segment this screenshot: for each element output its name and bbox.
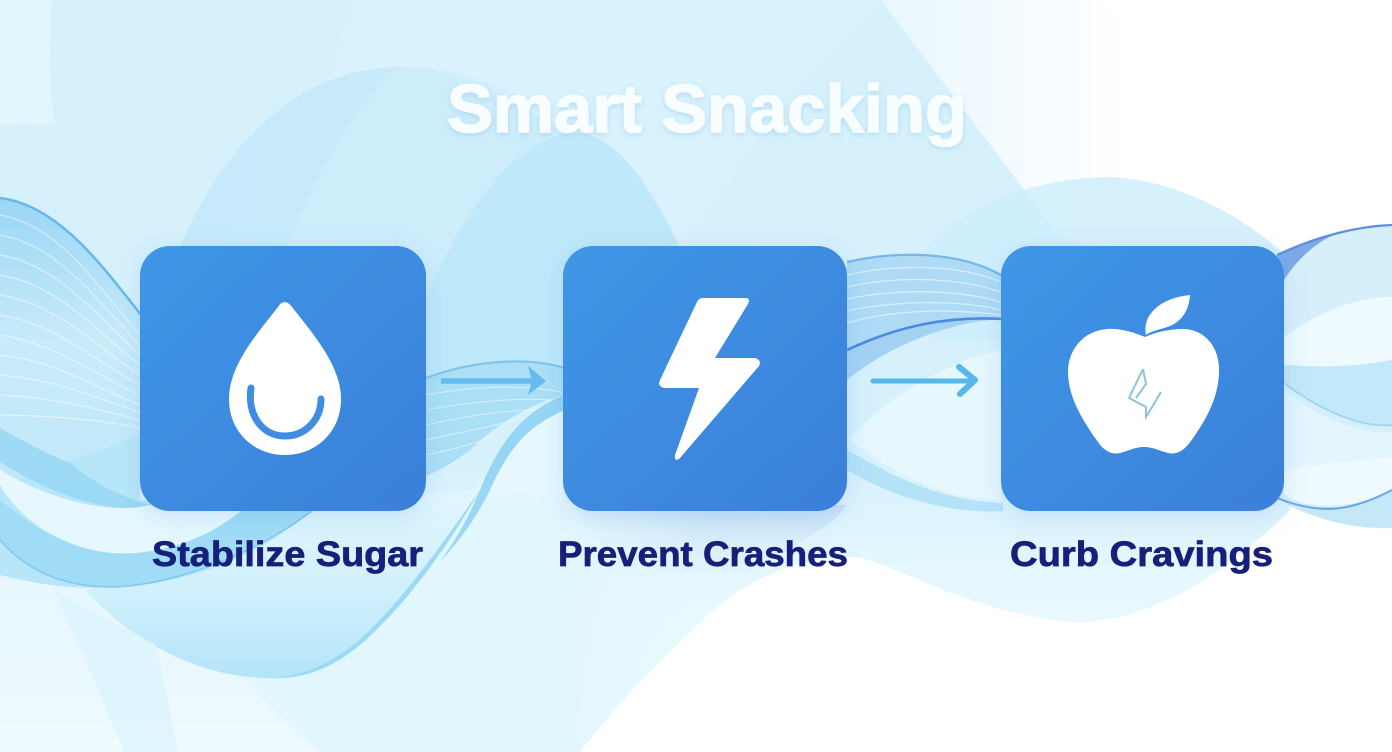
arrow: step 1 to step 2: [441, 366, 546, 395]
ribbon: between cards 1 and 2: [426, 361, 565, 562]
ribbon: far right: [1277, 225, 1392, 528]
arch: upper left: [160, 67, 690, 400]
card: prevent crashes: [563, 246, 847, 511]
step 2: prevent crashes: [558, 246, 848, 574]
card: curb cravings: [1001, 246, 1284, 511]
arch: centre: [426, 133, 690, 400]
under-card pale areas: [850, 350, 1001, 500]
icon: apple: [1068, 295, 1219, 454]
card: stabilize sugar: [140, 246, 426, 511]
label: stabilize sugar: Stabilize Sugar: [152, 535, 423, 574]
icon: water drop: [229, 302, 341, 455]
pale sweep below U: [241, 480, 700, 752]
ribbon: lower left sweep: [0, 428, 312, 588]
step 3: curb cravings: [1001, 246, 1284, 574]
ribbon: far left: [0, 198, 142, 485]
label: prevent crashes: Prevent Crashes: [558, 535, 848, 574]
ribbon: between cards 2 and 3: [847, 255, 1003, 511]
title: Smart Snacking: [447, 71, 967, 147]
arrow: step 2 to step 3: [873, 367, 975, 394]
label: curb cravings: Curb Cravings: [1010, 535, 1273, 574]
arch: above card 3: [919, 177, 1290, 340]
big U sweep: [85, 490, 480, 678]
step 1: stabilize sugar: [140, 246, 426, 574]
icon: lightning bolt: [659, 298, 760, 460]
